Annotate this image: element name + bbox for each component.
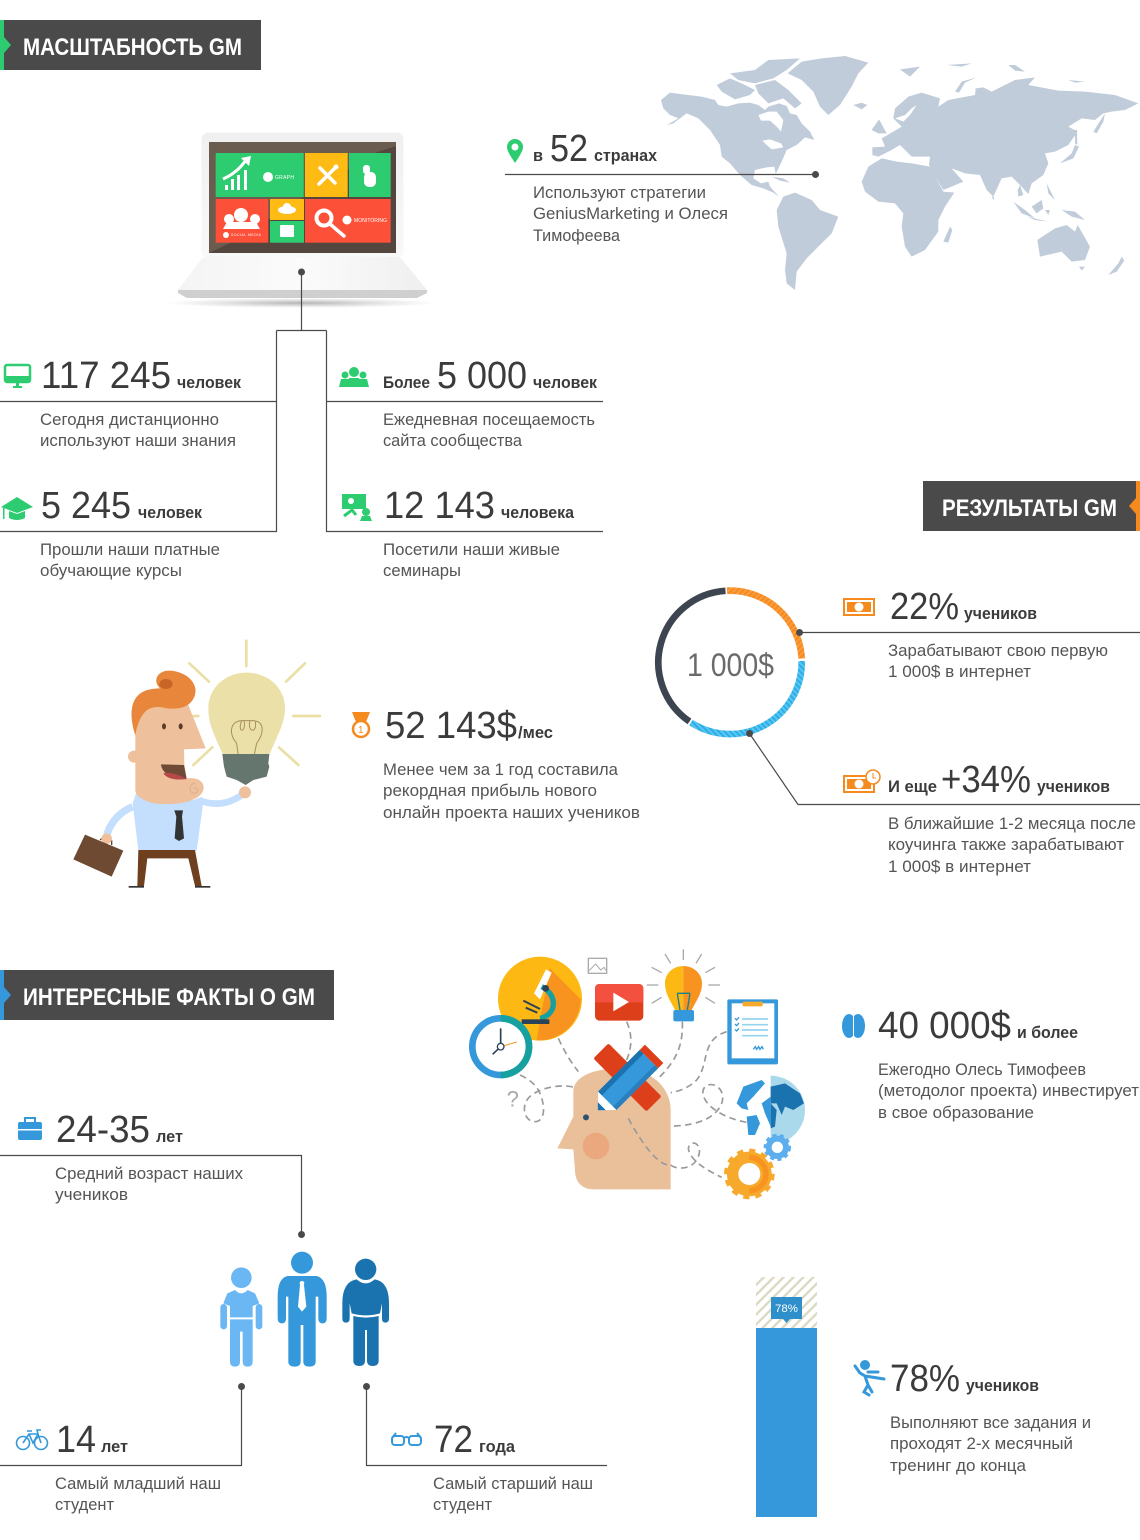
bar chart: 78% xyxy=(756,1277,817,1517)
stat: 117 245: Сегодня дистанционно xyxy=(40,410,219,429)
europe, asia, africa, oceania xyxy=(862,63,1138,275)
stat: more than 5 000: Ежедневная посещаемость xyxy=(383,410,595,429)
stat: another +34% students: +34% xyxy=(941,759,1031,801)
stat: more than 5 000: 5 000 xyxy=(437,355,527,397)
stat: 22% students: Зарабатывают свою первую xyxy=(888,641,1108,660)
icon: runner xyxy=(855,1362,884,1395)
stat: another +34% students: И еще xyxy=(888,777,937,796)
stat: 78% students: учеников xyxy=(966,1376,1039,1395)
heading: Масштабность GM xyxy=(0,20,261,70)
stat: 5 245: Прошли наши платные xyxy=(40,540,220,559)
stat: another +34% students: учеников xyxy=(1037,777,1110,796)
stat: 40 000$ per year: (методолог проекта) инвестирует xyxy=(878,1081,1139,1100)
stat: 22% students xyxy=(796,586,1140,681)
icon: money xyxy=(844,599,874,615)
stat: 52 143$ per month: онлайн проекта наших учеников xyxy=(383,803,640,822)
stat: more than 5 000: человек xyxy=(533,373,597,392)
stat: 12 143: человека xyxy=(501,503,575,522)
icon: money with clock xyxy=(844,770,880,792)
icon: three people xyxy=(220,1252,389,1367)
stat: 52 143$ per month: 52 143$ xyxy=(385,705,517,747)
stat: another +34% students: коучинга также зарабатывают xyxy=(888,835,1124,854)
stat: 78% students: тренинг до конца xyxy=(890,1456,1027,1475)
stat: 72 years: 72 xyxy=(434,1419,473,1461)
stat: 78% students xyxy=(855,1358,1091,1475)
laptop illustration: MONITORING xyxy=(354,218,387,224)
icon: graduation cap xyxy=(1,497,33,520)
stat: 52 countries: Тимофеева xyxy=(533,226,621,245)
stat: more than 5 000: Более xyxy=(383,373,430,392)
stat: 117 245: человек xyxy=(177,373,241,392)
icon: medal: 1 xyxy=(358,725,364,736)
figure: child xyxy=(220,1267,262,1367)
stat: 14 years: Самый младший наш xyxy=(55,1474,221,1493)
stat: another +34% students: В ближайшие 1-2 месяца после xyxy=(888,814,1136,833)
icon: chart on screen xyxy=(223,156,273,190)
stat: 72 years: студент xyxy=(433,1495,492,1514)
stat: 24-35 years: 24-35 xyxy=(56,1109,150,1151)
stat: 72 years xyxy=(363,1383,607,1514)
stat: 72 years: Самый старший наш xyxy=(433,1474,593,1493)
stat: 22% students: 22% xyxy=(890,586,959,628)
stat: 14 years: 14 xyxy=(56,1419,96,1461)
laptop illustration: GRAPH xyxy=(275,175,294,181)
stat: 24-35 years: лет xyxy=(156,1127,183,1146)
figure: adult xyxy=(278,1252,327,1367)
heading: Интересные факты о GM: ИНТЕРЕСНЫЕ ФАКТЫ О GM xyxy=(23,984,315,1011)
stat: 24-35 years: учеников xyxy=(55,1185,128,1204)
stat: 52 countries: 52 xyxy=(550,128,588,170)
stat: 5 245: 5 245 xyxy=(41,485,131,527)
laptop illustration xyxy=(166,132,436,308)
stat: 72 years: года xyxy=(479,1437,516,1456)
stat: 52 countries: странах xyxy=(594,146,658,165)
stat: 52 countries: Используют стратегии xyxy=(533,183,706,202)
icon: monitor xyxy=(5,365,30,388)
callout: 78%: 78% xyxy=(775,1303,798,1315)
stat: 40 000$ per year: 40 000$ xyxy=(878,1005,1011,1047)
stat: 52 143$ per month: рекордная прибыль нового xyxy=(383,781,597,800)
stat: 52 143$ per month xyxy=(352,705,640,822)
stat: 5 245 xyxy=(1,485,220,580)
stat: 14 years: лет xyxy=(101,1437,128,1456)
stat: 52 countries: GeniusMarketing и Олеся xyxy=(533,204,728,223)
stat: 40 000$ per year: в свое образование xyxy=(878,1103,1034,1122)
stat: 52 143$ per month: Менее чем за 1 год составила xyxy=(383,760,619,779)
icon: medal xyxy=(352,712,370,737)
heading: Масштабность GM: МАСШТАБНОСТЬ GM xyxy=(23,34,242,61)
stat: 14 years: студент xyxy=(55,1495,114,1514)
stat: 78% students: Выполняют все задания и xyxy=(890,1413,1091,1432)
icon: pin xyxy=(507,139,523,163)
stat: another +34% students xyxy=(746,730,1140,876)
stat: 40 000$ per year: Ежегодно Олесь Тимофеев xyxy=(878,1060,1086,1079)
icon: touch xyxy=(363,165,376,187)
stat: 22% students: учеников xyxy=(964,604,1037,623)
stat: 78% students: проходят 2-х месячный xyxy=(890,1434,1073,1453)
stat: more than 5 000 xyxy=(339,355,597,450)
stat: 40 000$ per year xyxy=(842,1005,1139,1122)
icon: group xyxy=(339,367,369,387)
illustration: head with ideas xyxy=(472,949,805,1197)
stat: 22% students: 1 000$ в интернет xyxy=(888,662,1031,681)
heading: Интересные факты о GM xyxy=(0,970,334,1020)
heading: Результаты GM xyxy=(923,481,1140,531)
donut chart: 1 000$ xyxy=(658,591,802,734)
stat: 78% students: 78% xyxy=(890,1358,960,1400)
icon: briefcase xyxy=(18,1118,42,1140)
stat: 52 countries xyxy=(505,128,819,245)
stat: 5 245: обучающие курсы xyxy=(40,561,182,580)
illustration: head with ideas: ? xyxy=(507,1087,519,1112)
icon: brain xyxy=(842,1013,865,1039)
stat: more than 5 000: сайта сообщества xyxy=(383,431,523,450)
icon: tools xyxy=(319,164,338,184)
figure: elder xyxy=(342,1259,389,1366)
americas and arctic xyxy=(661,56,868,290)
stat: 117 245: 117 245 xyxy=(41,355,171,397)
stat: 117 245 xyxy=(5,355,241,450)
connector tree from laptop xyxy=(0,268,603,532)
stat: 12 143: Посетили наши живые xyxy=(383,540,560,559)
stat: 52 143$ per month: /мес xyxy=(518,723,553,742)
icon: people xyxy=(223,208,260,238)
stat: 5 245: человек xyxy=(138,503,202,522)
stat: 24-35 years xyxy=(0,1109,305,1238)
stat: another +34% students: 1 000$ в интернет xyxy=(888,857,1031,876)
icon: glasses xyxy=(392,1433,421,1445)
world map xyxy=(661,56,1138,290)
stat: 12 143 xyxy=(342,485,575,580)
laptop illustration: SOCIAL MEDIA xyxy=(231,233,262,237)
stat: 117 245: используют наши знания xyxy=(40,431,236,450)
stat: 40 000$ per year: и более xyxy=(1017,1023,1078,1042)
donut chart: 1 000$: 1 000$ xyxy=(687,647,774,683)
stat: 52 countries: в xyxy=(533,146,543,165)
icon: cloud and note xyxy=(278,203,296,237)
stat: 14 years xyxy=(0,1383,245,1514)
stat: 24-35 years: Средний возраст наших xyxy=(55,1164,243,1183)
icon: seminar xyxy=(342,494,372,521)
callout: 78% xyxy=(771,1297,802,1323)
stat: 12 143: семинары xyxy=(383,561,461,580)
illustration: man with light bulb xyxy=(73,641,320,888)
stat: 12 143: 12 143 xyxy=(384,485,495,527)
icon: bicycle xyxy=(16,1430,48,1450)
icon: magnifier xyxy=(316,210,344,236)
